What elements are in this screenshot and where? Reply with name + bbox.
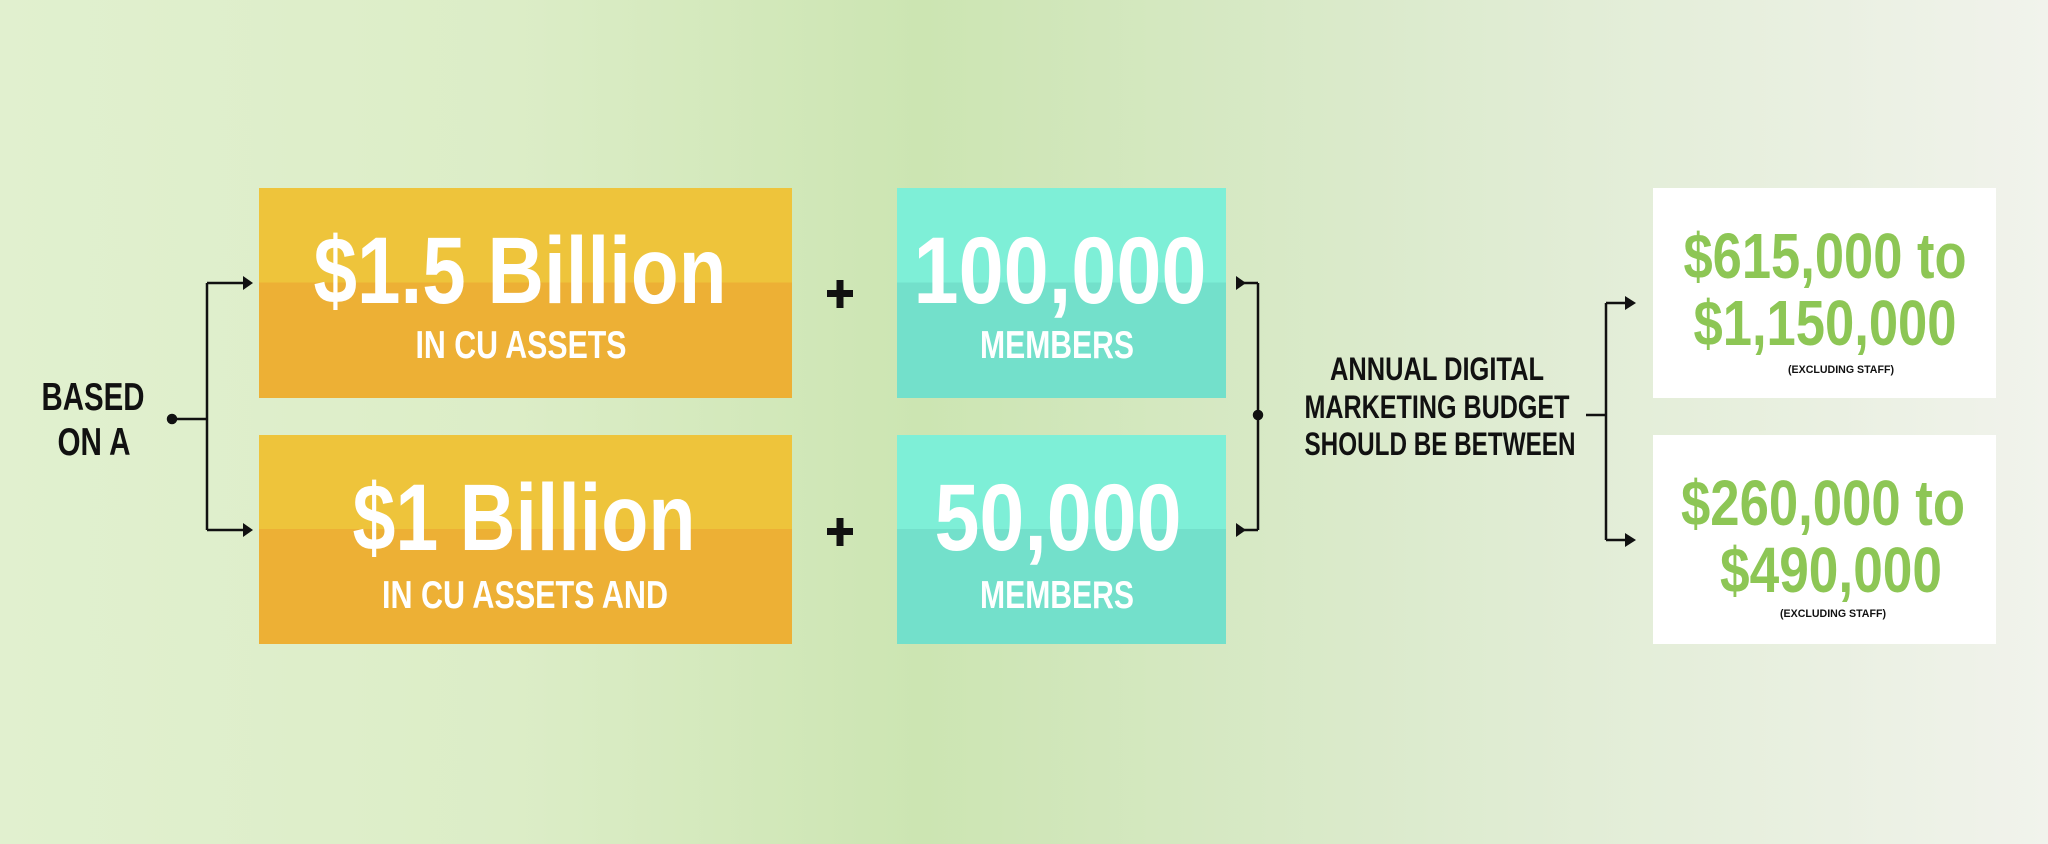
panel: $1 billion: IN CU ASSETS AND bbox=[382, 574, 668, 617]
text: annual digital marketing budget: SHOULD BE BETWEEN bbox=[1304, 426, 1576, 462]
panel: 50,000 members bbox=[897, 435, 1226, 644]
panel: 100,000 members: 100,000 bbox=[914, 218, 1206, 324]
panel: result 260,000 to 490,000: (EXCLUDING STAFF) bbox=[1780, 608, 1886, 620]
label: based on a bbox=[42, 376, 144, 464]
panel: result 615,000 to 1,150,000 bbox=[1653, 188, 1996, 398]
text: annual digital marketing budget: MARKETING BUDGET bbox=[1304, 389, 1570, 425]
split connector arrows bbox=[1586, 296, 1636, 547]
text: annual digital marketing budget bbox=[1304, 351, 1576, 462]
panel: result 615,000 to 1,150,000: $615,000 to bbox=[1684, 220, 1966, 292]
panel: result 615,000 to 1,150,000: (EXCLUDING STAFF) bbox=[1788, 364, 1894, 376]
text: annual digital marketing budget: ANNUAL DIGITAL bbox=[1330, 351, 1544, 387]
panel: result 260,000 to 490,000 bbox=[1653, 435, 1996, 644]
panel: $1.5 billion: $1.5 Billion bbox=[314, 218, 726, 324]
panel: $1 billion bbox=[259, 435, 792, 644]
panel: $1 billion: $1 Billion bbox=[352, 465, 696, 571]
panel: 50,000 members: MEMBERS bbox=[980, 574, 1134, 617]
panel: $1.5 billion: IN CU ASSETS bbox=[416, 324, 626, 367]
panel: result 260,000 to 490,000: $490,000 bbox=[1720, 534, 1942, 606]
panel: $1.5 billion bbox=[259, 188, 792, 398]
panel: 50,000 members: 50,000 bbox=[934, 465, 1182, 571]
label: based on a: BASED bbox=[42, 376, 144, 419]
left connector arrows bbox=[168, 276, 253, 537]
panel: result 615,000 to 1,150,000: $1,150,000 bbox=[1694, 287, 1956, 359]
panel: 100,000 members bbox=[897, 188, 1226, 398]
label: based on a: ON A bbox=[58, 421, 130, 464]
icon: plus top bbox=[827, 280, 853, 308]
panel: 100,000 members: MEMBERS bbox=[980, 324, 1134, 367]
right-side merge connector bbox=[1236, 276, 1262, 537]
panel: result 260,000 to 490,000: $260,000 to bbox=[1681, 467, 1965, 539]
icon: plus bottom bbox=[827, 518, 853, 546]
